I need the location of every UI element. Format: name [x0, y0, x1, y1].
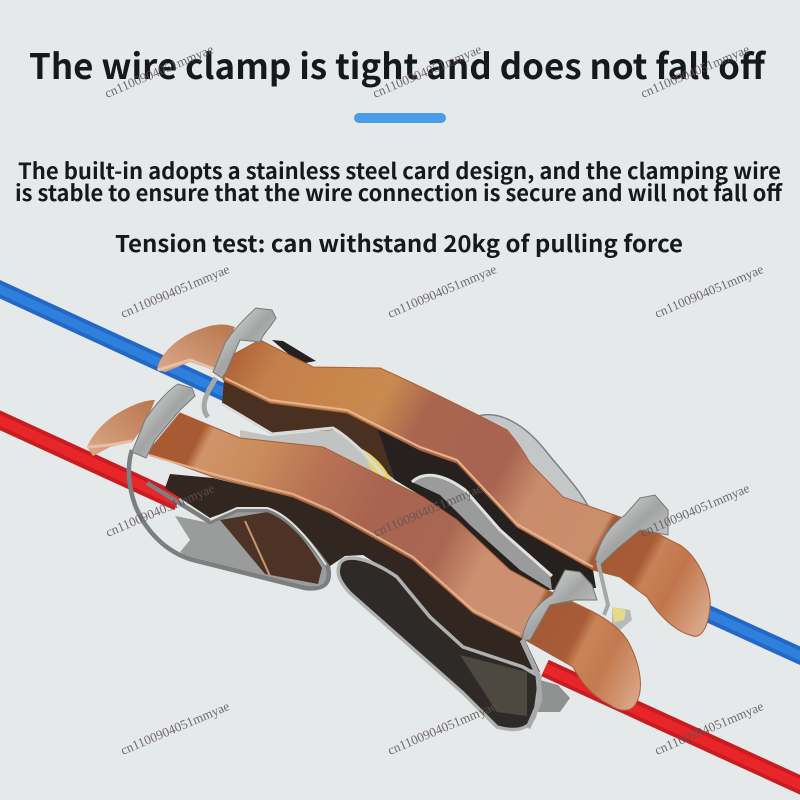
watermarks: cn1100904051mmyae: [118, 261, 232, 321]
watermarks: cn1100904051mmyae: [370, 41, 484, 101]
watermarks: cn1100904051mmyae: [638, 480, 752, 540]
description text: is stable to ensure that the wire connection is secure and will not fall off: [15, 176, 783, 208]
title: The wire clamp is tight and does not fall off: [29, 39, 767, 90]
watermarks: [102, 41, 766, 758]
bottom steel loop: [338, 558, 570, 729]
lower copper tab: [87, 400, 155, 456]
steel plate behind lower strip: [222, 404, 395, 483]
dark sliver above upper strip: [272, 340, 316, 364]
watermarks: cn1100904051mmyae: [102, 41, 216, 101]
central dark core: [378, 430, 596, 590]
description text: [15, 154, 783, 208]
blue wire: [0, 287, 800, 658]
lower right steel clip: [522, 570, 597, 728]
upper tab edge: [158, 360, 214, 370]
description text: The built-in adopts a stainless steel card design, and the clamping wire: [18, 154, 781, 186]
upper copper strip: [223, 340, 710, 636]
inner spring: [412, 475, 632, 630]
accent bar: [354, 113, 446, 123]
watermarks: cn1100904051mmyae: [652, 261, 766, 321]
left steel loop: [129, 450, 329, 588]
wire guide pin: [204, 378, 216, 417]
lower strip edge highlight: [149, 455, 520, 634]
lower tab edge: [88, 441, 132, 447]
tension test note: Tension test: can withstand 20kg of pulling force: [115, 225, 683, 259]
watermarks: cn1100904051mmyae: [638, 41, 752, 101]
upper strip edge highlight: [225, 378, 593, 567]
red wire: [0, 418, 800, 787]
watermarks: cn1100904051mmyae: [652, 698, 766, 758]
steel back plate: [478, 415, 592, 515]
upper copper tab: [157, 324, 235, 372]
upper right steel clip: [595, 495, 668, 615]
upper left steel clip: [213, 308, 276, 378]
dark wedge under upper strip: [222, 380, 440, 480]
watermarks: cn1100904051mmyae: [371, 480, 485, 540]
watermarks: cn1100904051mmyae: [103, 480, 217, 540]
lower left steel clip: [132, 384, 195, 458]
watermarks: cn1100904051mmyae: [385, 261, 499, 321]
lower copper strip: [147, 413, 640, 710]
watermarks: cn1100904051mmyae: [385, 698, 499, 758]
watermarks: cn1100904051mmyae: [118, 698, 232, 758]
lower body shadow: [165, 474, 540, 672]
clamp assembly: [87, 308, 710, 729]
